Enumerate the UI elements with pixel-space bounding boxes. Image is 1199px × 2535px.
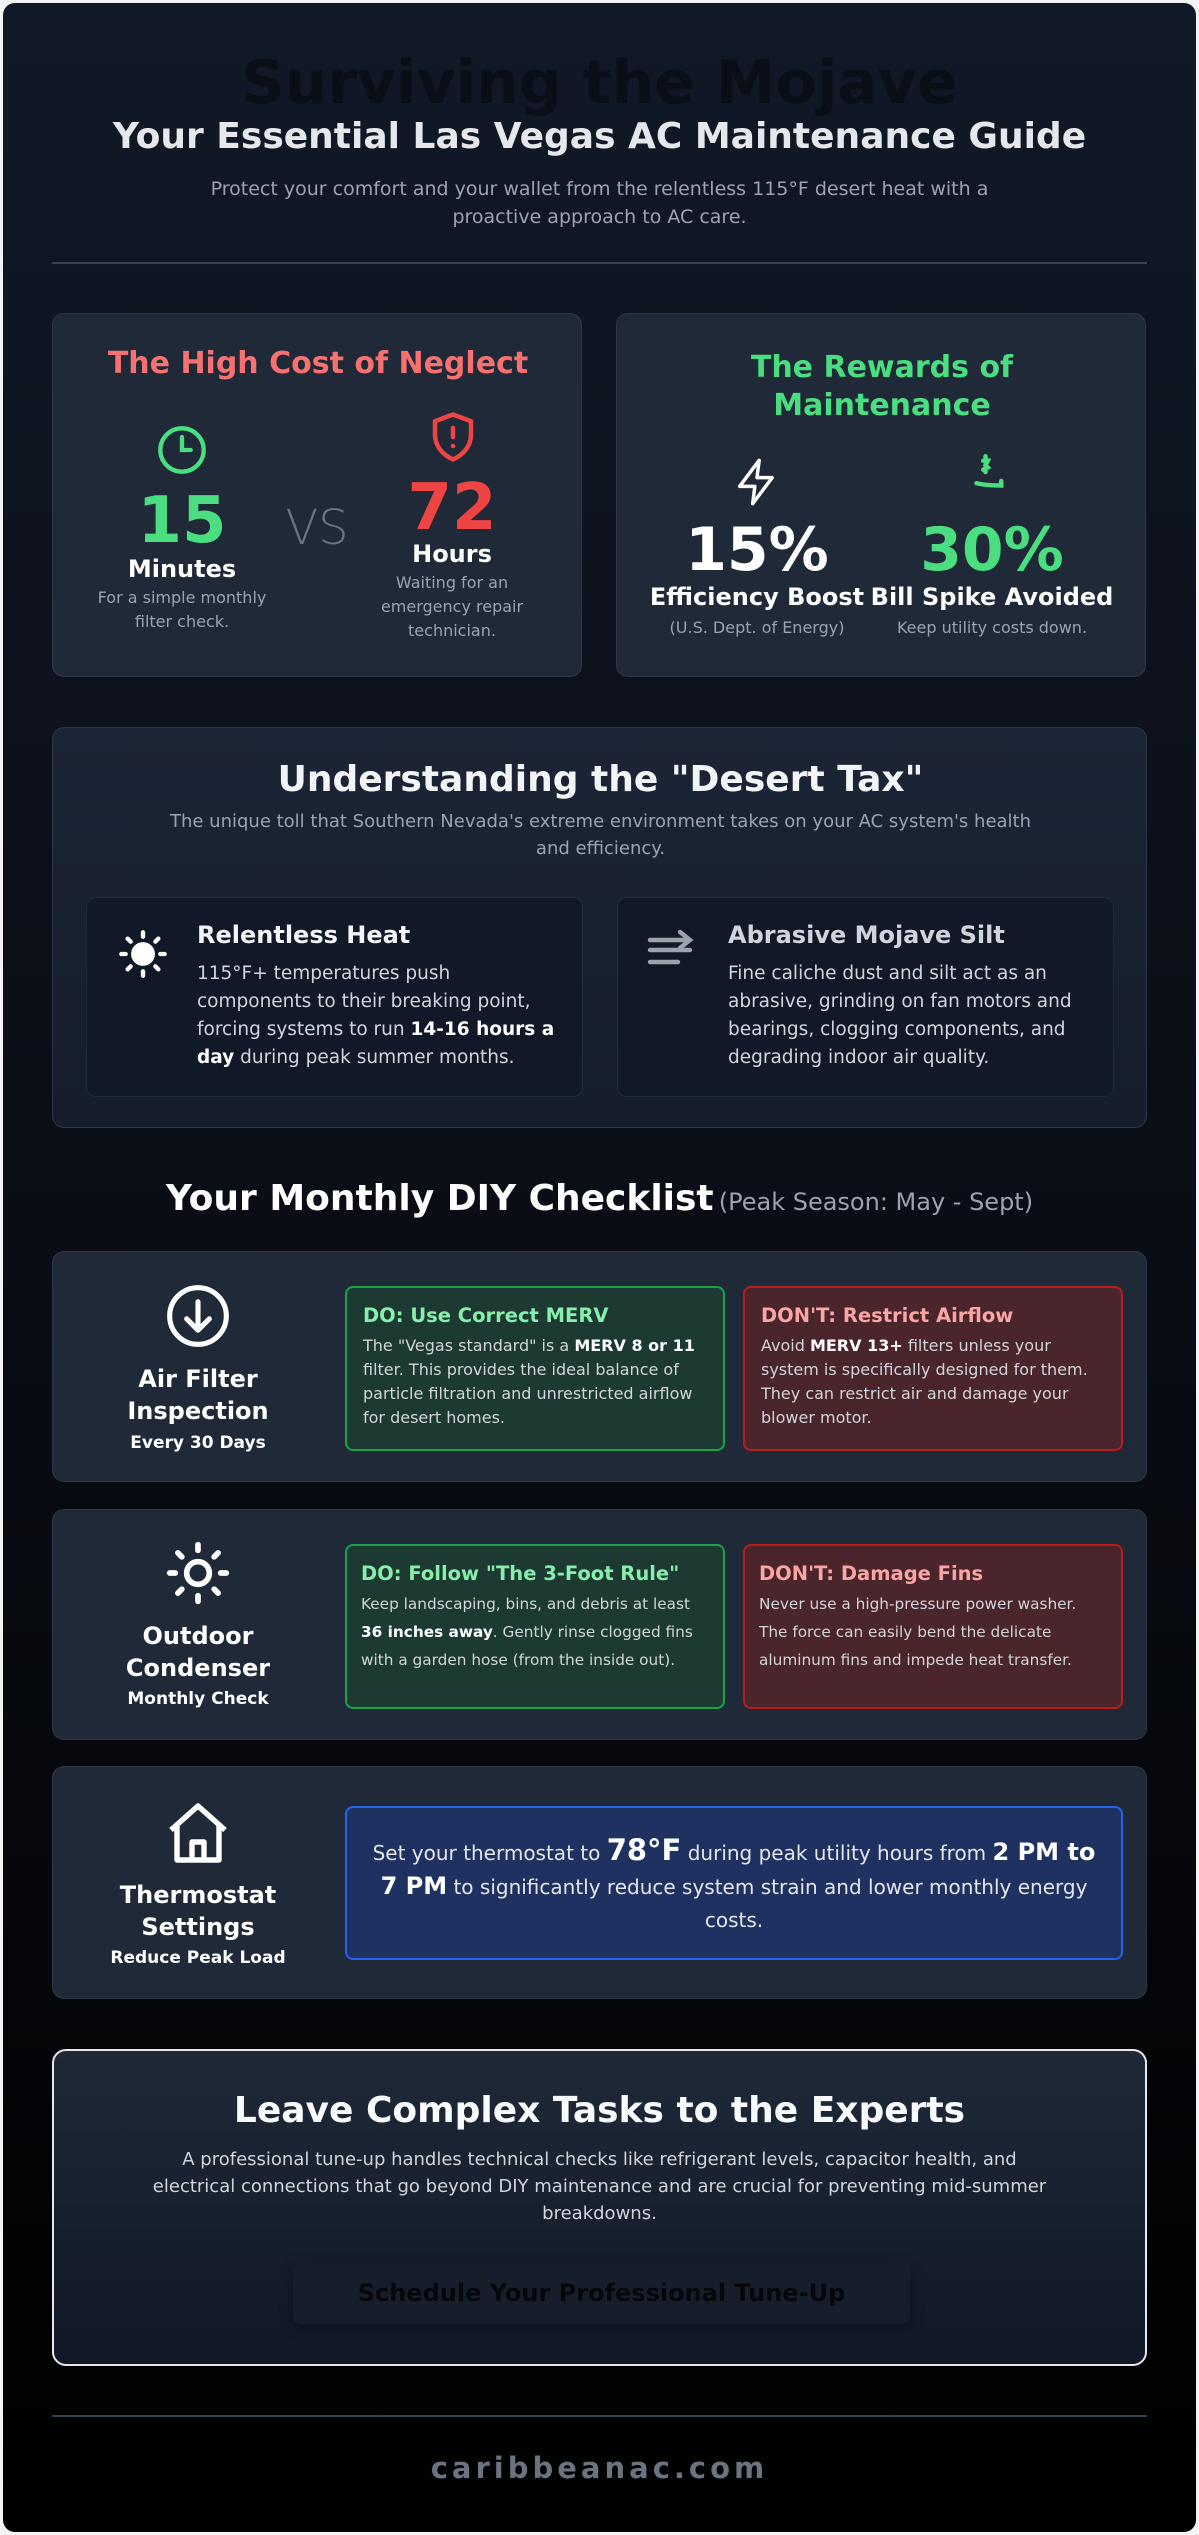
box: dont restrict [743, 1286, 1123, 1451]
box: do 3-foot rule: Keep landscaping, bins, and debris at least 36 inches away. Gently rinse clogged fins with a garden hose (from the inside out). [361, 1595, 693, 1669]
icon: dollar curve [974, 454, 1004, 488]
box: do 3-foot rule: DO: Follow "The 3-Foot Rule" [361, 1562, 679, 1585]
panel: desert tax [52, 727, 1147, 1128]
card: mojave silt [617, 897, 1114, 1097]
label: outdoor condenser: Outdoor [143, 1622, 253, 1650]
stat: 72 hours [381, 471, 524, 640]
heading: rewards [751, 350, 1014, 423]
text: relentless heat: Relentless Heat [197, 921, 410, 949]
icon: house [169, 1803, 227, 1863]
label: thermostat: Reduce Peak Load [110, 1948, 286, 1968]
label: air filter [127, 1365, 269, 1453]
box: dont restrict: DON'T: Restrict Airflow [761, 1304, 1013, 1327]
label: thermostat: Settings [141, 1913, 255, 1941]
stat: 30% bill spike: 30% [920, 515, 1064, 585]
box: do 3-foot rule [345, 1544, 725, 1709]
heading: neglect: The High Cost of Neglect [108, 346, 528, 381]
stat: 72 hours: Waiting for an [396, 573, 508, 592]
label: air filter: Inspection [127, 1397, 269, 1425]
box: do merv [345, 1286, 725, 1451]
box: do merv: The "Vegas standard" is a MERV 8 or 11 filter. This provides the ideal balance of particle filtration and unrestricted airflow for desert homes. [363, 1336, 695, 1427]
label: thermostat [110, 1881, 286, 1968]
icon: download circle [167, 1285, 229, 1347]
stat: 15% efficiency: 15% [685, 515, 829, 585]
stat: 30% bill spike: Keep utility costs down. [897, 618, 1087, 637]
panel: air filter [52, 1251, 1147, 1482]
label: outdoor condenser: Monthly Check [127, 1689, 269, 1709]
heading: checklist: Your Monthly DIY Checklist (Peak Season: May - Sept) [166, 1178, 1033, 1219]
stat: 15 minutes [98, 484, 266, 631]
panel: outdoor condenser [52, 1509, 1147, 1740]
label: thermostat: Thermostat [120, 1881, 276, 1909]
box: dont damage fins [743, 1544, 1123, 1709]
title: Surviving the Mojave [241, 48, 958, 118]
icon: sun outline [166, 1542, 230, 1604]
stat: 15% efficiency: Efficiency Boost [650, 583, 864, 611]
label: air filter: Air Filter [138, 1365, 258, 1393]
subtext: desert tax: The unique toll that Southern Nevada's extreme environment takes on your AC system's health and efficiency. [170, 811, 1031, 859]
stat: 15 minutes: For a simple monthly [98, 588, 266, 607]
label: outdoor condenser: Condenser [126, 1654, 270, 1682]
panel: experts cta [52, 2049, 1147, 2366]
text: relentless heat: 115°F+ temperatures push components to their breaking point, forcing systems to run 14-16 hours a day during peak summer months. [197, 963, 554, 1068]
icon: bolt [738, 458, 774, 506]
text: VS: VS [285, 500, 349, 556]
text: mojave silt: Fine caliche dust and silt act as an abrasive, grinding on fan motors and bearings, clogging components, and degrading indoor air quality. [728, 963, 1072, 1068]
label: outdoor condenser [126, 1622, 270, 1709]
footer: website: caribbeanac.com [431, 2451, 768, 2485]
stat: 15% efficiency [650, 515, 864, 637]
heading: rewards: The Rewards of [751, 350, 1013, 385]
stat: 15% efficiency: (U.S. Dept. of Energy) [670, 618, 844, 637]
panel: rewards of maintenance [616, 313, 1146, 677]
icon: arrows [648, 930, 694, 964]
panel: thermostat [52, 1766, 1147, 1999]
stat: 72 hours: emergency repair [381, 597, 523, 616]
stat: 72 hours: technician. [408, 621, 496, 640]
stat: 72 hours: 72 [407, 471, 497, 545]
stat: 15 minutes: filter check. [135, 612, 229, 631]
panel: high cost of neglect [52, 313, 582, 677]
stat: 15 minutes: 15 [137, 484, 227, 558]
box: dont damage fins: DON'T: Damage Fins [759, 1562, 983, 1585]
button: schedule [293, 2262, 910, 2324]
heading: experts: Leave Complex Tasks to the Experts [234, 2090, 965, 2131]
intro text: Protect your comfort and your wallet from the relentless 115°F desert heat with a proactive approach to AC care. [211, 178, 988, 228]
label: air filter: Every 30 Days [130, 1433, 266, 1453]
stat: 72 hours: Hours [412, 540, 492, 568]
stat: 30% bill spike: Bill Spike Avoided [871, 583, 1113, 611]
heading: desert tax: Understanding the "Desert Tax" [278, 759, 923, 800]
box: do merv: DO: Use Correct MERV [363, 1304, 608, 1327]
icon: sun [119, 930, 167, 978]
icon: clock [158, 426, 206, 474]
callout: thermostat tip: Set your thermostat to 78°F during peak utility hours from 2 PM to 7 PM to significantly reduce system strain and lower monthly energy costs. [373, 1833, 1095, 1932]
button: schedule: Schedule Your Professional Tune-Up [358, 2279, 845, 2307]
icon: shield [432, 412, 474, 462]
text: mojave silt: Abrasive Mojave Silt [728, 921, 1005, 949]
subtitle: Your Essential Las Vegas AC Maintenance Guide [113, 116, 1086, 157]
text: experts: A professional tune-up handles technical checks like refrigerant levels, capacitor health, and electrical connections that go beyond DIY maintenance and are crucial for preventing mid-summer breakdowns. [153, 2149, 1046, 2224]
box: dont restrict: Avoid MERV 13+ filters unless your system is specifically designed for them. They can restrict air and damage your blower motor. [761, 1336, 1088, 1427]
card: relentless heat [86, 897, 583, 1097]
callout: thermostat tip [345, 1806, 1123, 1960]
heading: rewards: Maintenance [773, 388, 991, 423]
box: dont damage fins: Never use a high-pressure power washer. The force can easily bend the delicate aluminum fins and impede heat transfer. [759, 1595, 1076, 1669]
stat: 30% bill spike [871, 515, 1113, 637]
stat: 15 minutes: Minutes [128, 555, 236, 583]
